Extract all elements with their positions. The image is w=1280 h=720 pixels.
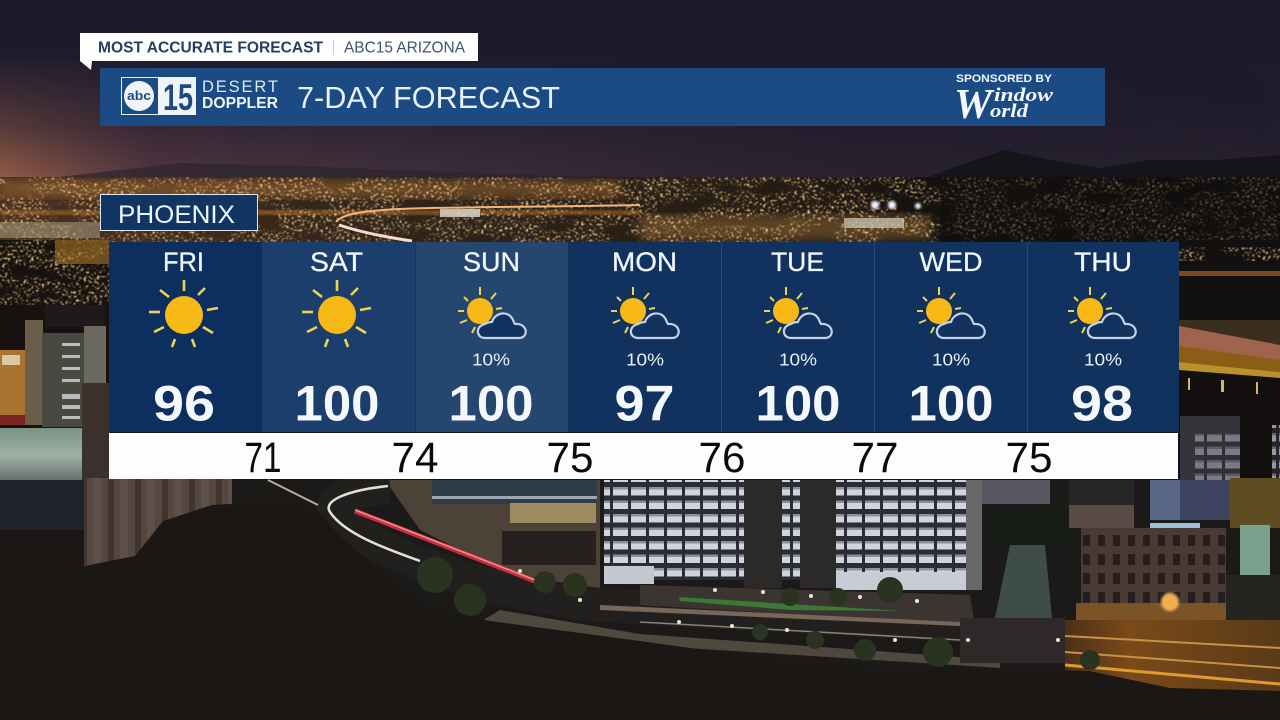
sponsor: [954, 73, 1053, 128]
tag: most accurate forecast: MOST ACCURATE FORECAST: [98, 40, 324, 56]
column: Saturday: [262, 242, 415, 432]
city lights: [0, 177, 1280, 243]
logo: desert doppler: DESERT: [202, 78, 278, 96]
column: Tuesday: TUE: [771, 247, 824, 277]
stadium lights: [871, 201, 921, 209]
column: Friday: FRI: [163, 247, 204, 277]
parking garages: [604, 480, 744, 580]
sponsor: W: [954, 82, 995, 128]
header title: 7-DAY FORECAST: [297, 80, 560, 115]
low temperature bar: 75: [1006, 434, 1052, 482]
column: Monday: [568, 242, 721, 432]
sponsor: orld: [990, 101, 1029, 122]
right buildings: [982, 480, 1050, 504]
lower ground: [0, 480, 1280, 720]
low temperature bar: 77: [852, 434, 898, 482]
tag: most accurate forecast: [80, 33, 478, 70]
column: Friday: 96: [153, 376, 215, 432]
street lamps: [518, 569, 1060, 642]
column: Monday: 97: [614, 376, 674, 432]
foreground hill: [0, 501, 1280, 720]
logo: abc15: 15: [163, 77, 193, 118]
location tag: Phoenix: [100, 194, 258, 230]
sidewalk and lawn: [640, 585, 975, 625]
sponsor: SPONSORED BY: [956, 73, 1053, 85]
column: Monday: MON: [612, 247, 677, 277]
right side city: [1179, 240, 1280, 480]
logo: desert doppler: [202, 78, 278, 112]
column: Friday: [109, 242, 262, 432]
column: Thursday: 98: [1071, 376, 1133, 432]
logo: desert doppler: DOPPLER: [202, 95, 278, 112]
column: Saturday: SAT: [310, 247, 363, 277]
column: Thursday: 10%: [1084, 350, 1122, 370]
column: Sunday: 10%: [472, 350, 510, 370]
low temperature bar: 76: [698, 434, 746, 482]
column: Wednesday: 100: [908, 376, 994, 432]
column: Tuesday: 10%: [779, 350, 817, 370]
silo tower base: [84, 478, 232, 578]
header bar: [100, 68, 1105, 128]
freeway lights: [336, 205, 640, 222]
low temperature bar: 74: [392, 434, 438, 482]
silo tower top: [82, 383, 110, 483]
city plain: [0, 177, 1280, 247]
road curve: [333, 487, 960, 625]
left buildings: [0, 240, 110, 580]
side street: [995, 545, 1052, 618]
column: Thursday: THU: [1074, 247, 1132, 277]
location tag: Phoenix: PHOENIX: [118, 201, 235, 229]
forecast panel: [109, 242, 1179, 432]
city glow band: [0, 180, 620, 198]
column: Wednesday: [874, 242, 1027, 432]
column: Tuesday: [721, 242, 874, 432]
column: Monday: 10%: [626, 350, 664, 370]
column: Wednesday: 10%: [932, 350, 970, 370]
sky: [0, 0, 1280, 190]
column: Saturday: 100: [294, 376, 380, 432]
distant mountains: [50, 163, 620, 178]
low temperature bar: 75: [546, 434, 594, 482]
column: Sunday: [415, 242, 568, 432]
column: Sunday: 100: [448, 376, 534, 432]
street trees: [417, 557, 1100, 670]
column: Wednesday: WED: [920, 247, 982, 277]
low temperature bar: 71: [244, 434, 282, 482]
logo: abc15: [122, 77, 196, 118]
column: Tuesday: 100: [756, 376, 840, 432]
plaza and mall: [385, 480, 600, 595]
sponsor: indow: [994, 85, 1053, 106]
column: Thursday: [1027, 242, 1179, 432]
tag: most accurate forecast: ABC15 ARIZONA: [344, 40, 466, 56]
column: Sunday: SUN: [463, 247, 520, 277]
orange road: [1065, 620, 1280, 692]
logo: abc15: abc: [127, 88, 151, 103]
low temperature bar: [109, 433, 1178, 482]
